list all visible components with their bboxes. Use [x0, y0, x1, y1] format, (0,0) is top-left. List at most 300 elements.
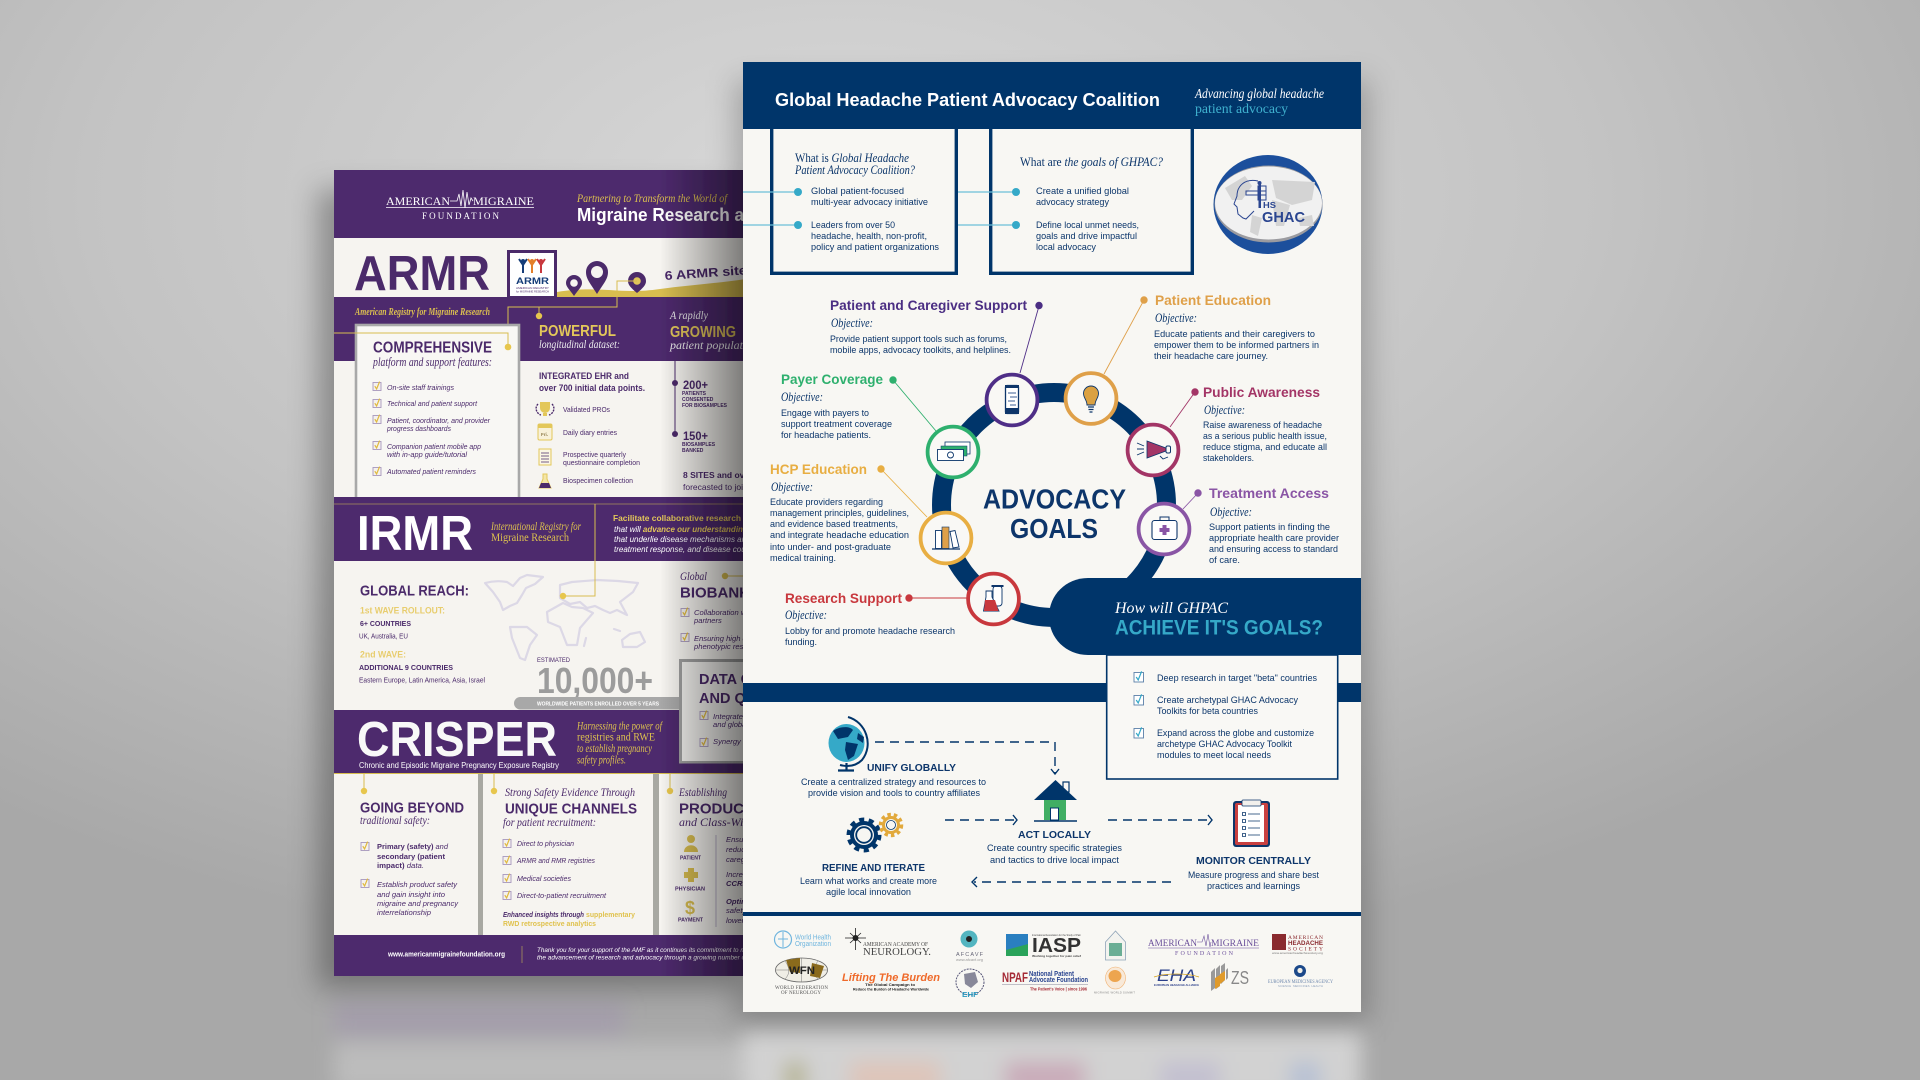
goal: HCP education: Objective: [771, 480, 813, 494]
icon: money [938, 442, 970, 460]
footer website: www.americanmigrainefoundation.org [387, 952, 505, 958]
card: comprehensive features: progress dashboards [386, 424, 451, 433]
logo: GHAC [1214, 155, 1322, 254]
node: treatment access [1139, 504, 1189, 554]
column: going beyond: migraine and pregnancy [377, 899, 459, 908]
column: growing population: 8 SITES and over [683, 470, 753, 480]
logo: orange brain [1094, 967, 1135, 994]
floor reflection [334, 1002, 1361, 1080]
process cycle [800, 717, 1319, 898]
enrollment stat: 10,000+ [537, 660, 653, 701]
step: monitor centrally: MONITOR CENTRALLY [1196, 855, 1311, 867]
column: growing population: CONSENTED [682, 397, 714, 403]
column: powerful dataset: over 700 initial data points. [539, 383, 645, 393]
logo: World Federation of Neurology: WORLD FEDERATION [775, 986, 828, 991]
panel: goals of GHPAC: Define local unmet needs, [1036, 220, 1139, 231]
footer thanks: Thank you for your support of the AMF as it continues its commitment to mi [537, 947, 748, 954]
step: monitor centrally: Measure progress and share best [1188, 870, 1319, 881]
step: act locally [987, 780, 1122, 866]
icon: megaphone [1137, 441, 1170, 459]
connector lines [508, 281, 637, 347]
node: payer coverage [928, 427, 978, 477]
logo: American Headache Society: www.americanheadachesociety.org [1272, 951, 1324, 955]
logo: IASP [1006, 933, 1081, 958]
logo: Lifting The Burden: The Global Campaign to [865, 983, 915, 987]
footer thanks [537, 947, 748, 962]
icon: books [932, 527, 960, 549]
node: patient education [1066, 373, 1116, 424]
logo: EHA: EHA [1157, 966, 1196, 985]
logo: AFCAVF: AFCAVF [956, 952, 984, 958]
goal: public awareness: Raise awareness of headache [1203, 420, 1322, 431]
panel: what is GHPAC: headache, health, non-profit, [811, 231, 927, 242]
IRMR band [334, 497, 746, 561]
logo: Lifting The Burden: Lifting The Burden [842, 972, 940, 984]
step: unify globally: Create a centralized strategy and resources to [801, 777, 986, 788]
card: comprehensive features: COMPREHENSIVE [373, 340, 492, 356]
enrollment stat [514, 657, 694, 710]
column: powerful dataset: Daily diary entries [563, 428, 617, 437]
logo: ZS [1211, 963, 1249, 991]
logo: World Health Organization: Organization [795, 941, 831, 948]
logo: National Patient Advocate Foundation: The Patient's Voice | since 1996 [1030, 986, 1087, 992]
data quality box: AND QUALITY [699, 691, 798, 707]
step: refine and iterate: REFINE AND ITERATE [822, 862, 925, 874]
goal: public awareness: Objective: [1204, 403, 1245, 417]
column: product safety: Increase [726, 870, 755, 879]
header tagline [576, 191, 765, 225]
step: refine and iterate [800, 814, 937, 898]
column: growing population: GROWING [670, 324, 736, 341]
goal: HCP education: Educate providers regarding [770, 497, 883, 508]
leader lines [881, 300, 1198, 598]
logo: GHAC: GHAC [1262, 209, 1305, 226]
panel: achieve checklist: archetype GHAC Advocacy Toolkit [1157, 739, 1292, 750]
column: growing population: 150+ [683, 429, 708, 443]
callout: how will GHPAC achieve its goals: How will GHPAC [1114, 600, 1228, 617]
global reach [359, 582, 485, 684]
logo: American Migraine Foundation: AMERICAN [1148, 938, 1197, 948]
ARMR logo box: AMERICAN REGISTRY [516, 286, 549, 290]
icon: house [1034, 780, 1077, 821]
column: unique channels: Direct-to-patient recruitment [517, 891, 607, 900]
goal: treatment access: Treatment Access [1209, 485, 1329, 501]
column: unique channels: for patient recruitment: [503, 815, 596, 829]
goal: patient education: their headache care journey. [1154, 351, 1268, 362]
column: powerful dataset: questionnaire completion [563, 458, 640, 467]
logo: World Federation of Neurology: WFN [789, 965, 815, 977]
node: patient and caregiver support [987, 375, 1037, 425]
column: going beyond: secondary (patient [377, 852, 445, 861]
CRISPER band [334, 710, 746, 773]
logo: World Federation of Neurology: OF NEUROLOGY [781, 991, 821, 996]
column: product safety: PHYSICIAN [675, 886, 705, 892]
header tagline: Partnering to Transform the World of [576, 191, 728, 205]
goal: HCP education: into under- and post-graduate [770, 542, 891, 553]
goal: HCP education: and integrate headache education [770, 530, 909, 541]
goal: treatment access: Objective: [1210, 505, 1252, 519]
logo: IASP: IASP [1032, 935, 1081, 957]
goal: research support: funding. [785, 637, 817, 648]
goal: payer coverage: Objective: [781, 390, 823, 404]
step: act locally: ACT LOCALLY [1018, 829, 1091, 841]
global reach: 2nd WAVE: [360, 650, 406, 660]
logo: EHF [956, 969, 984, 999]
purple band [334, 297, 746, 361]
global biobank: partners [693, 616, 722, 625]
goal: treatment access: appropriate health care provider [1209, 533, 1339, 544]
logo: AFCAVF: www.afcavf.org [956, 957, 983, 962]
goal: patient education: Patient Education [1155, 292, 1271, 308]
column: unique channels [491, 774, 637, 928]
column: product safety: reduce [726, 845, 749, 854]
step: act locally: Create country specific strategies [987, 843, 1122, 854]
goal: patient and caregiver support: Objective: [831, 316, 873, 330]
icon: trophy [536, 402, 554, 416]
data quality box: DATA COLLECTION [699, 672, 835, 688]
global biobank: BIOBANK [680, 584, 750, 602]
icon: clipboard [1233, 800, 1270, 847]
logo: American Headache Society [1272, 934, 1324, 955]
icon: phone [1005, 385, 1019, 414]
arrow: unify to act [875, 742, 1059, 774]
logo: American Headache Society: SOCIETY [1288, 946, 1323, 952]
IRMR description: that underlie disease mechanisms and [614, 535, 751, 544]
question: What are the goals of GHPAC? [1020, 154, 1163, 169]
panel: achieve checklist: Deep research in target "beta" countries [1157, 673, 1317, 684]
ring [942, 392, 1166, 618]
card: comprehensive features: Companion patient mobile app [387, 442, 481, 451]
icon: patient [684, 835, 698, 852]
goal: treatment access: and ensuring access to standard [1209, 544, 1338, 555]
panel: goals of GHPAC [958, 127, 1192, 273]
section: IRMR [334, 497, 835, 762]
CRISPER full name: Chronic and Episodic Migraine Pregnancy Exposure Registry [359, 761, 559, 770]
column: going beyond: Primary (safety) and [377, 842, 449, 851]
data quality box: Integrated [713, 712, 748, 721]
step: monitor centrally [1188, 800, 1319, 892]
panel: achieve checklist: modules to meet local needs [1157, 750, 1271, 761]
IRMR description: Facilitate collaborative research [613, 513, 741, 523]
column: unique channels: Direct to physician [517, 839, 574, 848]
column: product safety [667, 774, 758, 927]
panel: what is GHPAC: Leaders from over 50 [811, 220, 895, 231]
card: comprehensive features: Patient, coordinator, and provider [387, 416, 490, 425]
logo: GHAC: HS [1263, 200, 1276, 210]
column: going beyond: Establish product safety [377, 880, 458, 889]
column: product safety: Establishing [678, 785, 727, 799]
global reach: 1st WAVE ROLLOUT: [360, 606, 445, 616]
IRMR subtitle: Migraine Research [491, 532, 569, 544]
logo: EHA: EUROPEAN HEADACHE ALLIANCE [1154, 983, 1199, 987]
column: going beyond: GOING BEYOND [360, 800, 464, 816]
goal: treatment access: of care. [1209, 555, 1240, 566]
global biobank: phenotypic research [693, 642, 762, 651]
partner rule [743, 912, 1361, 916]
panel: achieve checklist [1107, 655, 1338, 779]
column: product safety: PAYMENT [678, 918, 704, 924]
IRMR description [613, 513, 757, 554]
node: public awareness [1128, 425, 1178, 475]
node: HCP education [921, 513, 971, 563]
footer thanks: the advancement of research and advocacy through a growing number of [537, 954, 748, 962]
column: unique channels: supplementary [586, 910, 636, 919]
logo: American Academy of Neurology [845, 928, 931, 958]
logo: orange brain: MIGRAINE WORLD SUMMIT [1094, 990, 1135, 994]
column dividers [478, 774, 483, 935]
map pins [566, 261, 646, 296]
goal: patient and caregiver support: Patient and Caregiver Support [830, 297, 1027, 313]
logo: National Patient Advocate Foundation [1002, 969, 1088, 992]
logo: American Migraine Foundation: FOUNDATION [1175, 951, 1234, 957]
logo: National Patient Advocate Foundation: National Patient [1029, 971, 1075, 978]
logo: American Academy of Neurology: NEUROLOGY. [863, 946, 931, 958]
column: going beyond: and gain insight into [377, 890, 445, 899]
gold hill [557, 279, 746, 297]
logo: National Patient Advocate Foundation: NPAF [1002, 969, 1028, 985]
column: unique channels: Medical societies [517, 874, 571, 883]
header tagline: Migraine Research and [577, 205, 765, 225]
column: product safety: PATIENT [680, 856, 702, 862]
tagline [1194, 87, 1324, 117]
panel: what is GHPAC: Global patient-focused [811, 186, 904, 197]
header band [334, 170, 765, 238]
column: powerful dataset [536, 313, 645, 488]
icon: gears [849, 814, 902, 850]
logo: IASP: International Association for the Study of Pain [1032, 933, 1081, 937]
goal: patient and caregiver support: mobile apps, advocacy toolkits, and helplines. [830, 345, 1011, 356]
column: growing population: forecasted to join [683, 482, 748, 492]
goal: HCP education: management principles, guidelines, [770, 508, 909, 519]
goal: payer coverage: support treatment coverage [781, 419, 892, 430]
logo: World Health Organization [774, 931, 831, 948]
panel: what is GHPAC: policy and patient organizations [811, 242, 939, 253]
column: product safety: and Class-Wide [679, 815, 755, 829]
navy divider band [743, 683, 1361, 702]
goal: payer coverage [781, 371, 897, 441]
logo: National Patient Advocate Foundation: Advocate Foundation [1029, 977, 1088, 984]
logo: American Migraine Foundation: AMERICAN [386, 194, 450, 208]
column: powerful dataset: POWERFUL [539, 323, 616, 340]
IRMR subtitle [490, 521, 581, 544]
step: unify globally [801, 717, 986, 799]
panel: achieve checklist: Expand across the globe and customize [1157, 728, 1314, 739]
goal: patient education: Objective: [1155, 311, 1197, 325]
section: ARMR [334, 247, 758, 500]
logo: American Migraine Foundation: FOUNDATION [422, 211, 500, 221]
ring title: GOALS [1010, 513, 1098, 544]
panel: goals of GHPAC: goals and drive impactful [1036, 231, 1137, 242]
arrow: refine to act [945, 815, 1017, 825]
step: refine and iterate: Learn what works and create more [800, 876, 937, 887]
goal: patient education [1140, 292, 1319, 362]
step: monitor centrally: practices and learnings [1207, 881, 1300, 892]
column: product safety: CCRP [726, 879, 748, 888]
column: product safety: Ensure [726, 835, 750, 844]
column: product safety: PRODUCT [679, 800, 753, 818]
logo: AFCAVF [956, 930, 984, 962]
registry subtitle: American Registry for Migraine Research [354, 307, 490, 318]
enrollment stat: ESTIMATED [537, 657, 570, 664]
CRISPER tagline: Harnessing the power of [576, 720, 663, 732]
title: Global Headache Patient Advocacy Coalition [775, 89, 1160, 110]
icon: light bulb [1084, 386, 1098, 412]
icon: flask [539, 474, 551, 488]
global reach: UK, Australia, EU [359, 634, 408, 640]
ARMR logo box [508, 252, 556, 298]
goal: research support: Lobby for and promote headache research [785, 626, 955, 637]
goal: public awareness: Public Awareness [1203, 384, 1320, 400]
card: comprehensive features: platform and support features: [372, 355, 492, 369]
ring title [983, 484, 1126, 544]
data quality box [680, 660, 835, 762]
column: powerful dataset: longitudinal dataset: [539, 337, 620, 351]
global reach: 6+ COUNTRIES [360, 619, 411, 628]
icon: globe [828, 717, 868, 770]
logo: European Medicines Agency: SCIENCE MEDICINES HEALTH [1278, 984, 1323, 988]
column: growing population: BIOSAMPLES [682, 442, 716, 448]
poster: Global Headache Patient Advocacy Coalition [743, 62, 1361, 1012]
goal: research support [785, 590, 955, 648]
column: growing population: BANKED [682, 448, 704, 454]
goal: public awareness: stakeholders. [1203, 453, 1254, 464]
global reach: Eastern Europe, Latin America, Asia, Israel [359, 678, 485, 684]
right poster cast shadow [660, 170, 745, 976]
global biobank: Ensuring high quality [694, 634, 766, 643]
advocacy goals ring diagram [881, 300, 1198, 624]
IRMR description: that will advance our understanding [614, 525, 748, 534]
icon: questionnaire [539, 449, 551, 465]
column: growing population: FOR BIOSAMPLES [682, 403, 728, 409]
step: act locally: and tactics to drive local impact [990, 855, 1119, 866]
column: powerful dataset: Biospecimen collection [563, 476, 633, 485]
poster: American Migraine Foundation [334, 170, 835, 976]
column: unique channels: RWD retrospective analytics [503, 919, 596, 928]
map connector [560, 504, 595, 599]
step: unify globally: provide vision and tools to country affiliates [808, 788, 980, 799]
column: going beyond [360, 774, 464, 917]
step: unify globally: UNIFY GLOBALLY [867, 762, 956, 774]
question: What is Global Headache [795, 150, 909, 165]
step: refine and iterate: agile local innovation [826, 887, 911, 898]
logo: house emblem [1106, 931, 1126, 960]
ARMR logo box: ARMR [516, 276, 549, 287]
IRMR description: treatment response, and disease course [614, 545, 757, 554]
column: unique channels: ARMR and RMR registries [516, 856, 595, 865]
card: comprehensive features: Automated patient reminders [386, 467, 476, 476]
logo: Lifting The Burden: Reduce the Burden of Headache Worldwide [853, 988, 929, 992]
goal: treatment access: Support patients in finding the [1209, 522, 1330, 533]
column: growing population [669, 308, 758, 492]
logo: American Migraine Foundation: MIGRAINE [1211, 938, 1260, 948]
CRISPER tagline [576, 720, 663, 766]
goal: payer coverage: for headache patients. [781, 430, 871, 441]
icon: first aid kit [1152, 517, 1177, 540]
goal: patient and caregiver support [830, 297, 1043, 356]
card: comprehensive features: with in-app guide/tutorial [387, 450, 467, 459]
panel: what is GHPAC [743, 127, 956, 273]
world map [485, 575, 645, 660]
global biobank: Collaboration with [694, 608, 754, 617]
ring title: ADVOCACY [983, 484, 1126, 514]
logo: European Medicines Agency: EUROPEAN MEDICINES AGENCY [1268, 979, 1333, 985]
global biobank: Global [680, 571, 707, 583]
logo: American Academy of Neurology: AMERICAN ACADEMY OF [863, 942, 929, 948]
IRMR subtitle: International Registry for [490, 521, 581, 533]
column: going beyond: impact) data. [377, 861, 424, 870]
goal: treatment access [1194, 485, 1339, 566]
column: unique channels: Enhanced insights through [503, 910, 584, 919]
column: going beyond: interrelationship [377, 908, 431, 917]
icon: calendar [538, 424, 552, 440]
goal: payer coverage: Engage with payers to [781, 408, 869, 419]
logo: ZS: ZS [1231, 968, 1249, 988]
global reach: ADDITIONAL 9 COUNTRIES [359, 663, 453, 672]
ARMR logo box: for MIGRAINE RESEARCH [516, 290, 549, 294]
sites label: 6 ARMR sites [664, 263, 755, 283]
CRISPER title: CRISPER [357, 713, 557, 767]
CRISPER tagline: registries and RWE [577, 732, 655, 744]
callout: how will GHPAC achieve its goals [1049, 578, 1361, 655]
logo: World Health Organization: World Health [795, 934, 831, 942]
panel: achieve checklist: Toolkits for beta countries [1157, 706, 1258, 717]
column: powerful dataset: INTEGRATED EHR and [539, 371, 629, 381]
logo: American Headache Society: AMERICAN [1288, 935, 1323, 941]
column: growing population: patient population [669, 338, 758, 352]
panel: what is GHPAC: multi-year advocacy initiative [811, 197, 928, 208]
poster shadows [318, 80, 1369, 1022]
panel: goals of GHPAC: advocacy strategy [1036, 197, 1109, 208]
logo: World Federation of Neurology [775, 958, 828, 996]
global biobank [680, 571, 766, 651]
panel: what is GHPAC: Patient Advocacy Coalition? [794, 162, 915, 177]
goal: public awareness [1191, 384, 1327, 464]
column: product safety: lower [726, 916, 745, 925]
icon: payment dollar: $ [685, 898, 695, 918]
logo: Lifting The Burden [842, 972, 940, 992]
logo: European Medicines Agency [1268, 965, 1333, 988]
card: comprehensive features: On-site staff trainings [387, 383, 454, 392]
goal: patient education: Educate patients and their caregivers to [1154, 329, 1315, 340]
ARMR title: ARMR [354, 247, 490, 301]
logo: IASP: Working together for pain relief [1032, 954, 1081, 958]
goal: HCP education [770, 461, 909, 564]
section: CRISPER [334, 710, 758, 935]
goal: public awareness: as a serious public health issue, [1203, 431, 1327, 442]
goal: public awareness: reduce stigma, and educate all [1203, 442, 1327, 453]
header [743, 62, 1361, 129]
logo: American Migraine Foundation [386, 190, 534, 221]
IRMR title: IRMR [357, 507, 473, 561]
tagline: patient advocacy [1195, 102, 1288, 117]
panel: goals of GHPAC: local advocacy [1036, 242, 1096, 253]
goal: HCP education: and evidence based treatments, [770, 519, 898, 530]
goal: research support: Research Support [785, 590, 902, 606]
panel: goals of GHPAC: Create a unified global [1036, 186, 1129, 197]
footer band [334, 935, 748, 976]
column: growing population: 200+ [683, 378, 708, 392]
column: product safety: caregiver [726, 855, 758, 864]
goal: HCP education: HCP Education [770, 461, 867, 477]
arrow: act to monitor [1108, 815, 1212, 825]
logo: American Migraine Foundation: MIGRAINE [473, 194, 534, 208]
icon: physician plus [684, 868, 698, 882]
goal: research support: Objective: [785, 608, 827, 622]
column: unique channels: Strong Safety Evidence Through [505, 785, 635, 799]
data quality box: and global [713, 720, 748, 729]
card: comprehensive features [334, 325, 519, 500]
goal: patient and caregiver support: Provide patient support tools such as forums, [830, 334, 1007, 345]
